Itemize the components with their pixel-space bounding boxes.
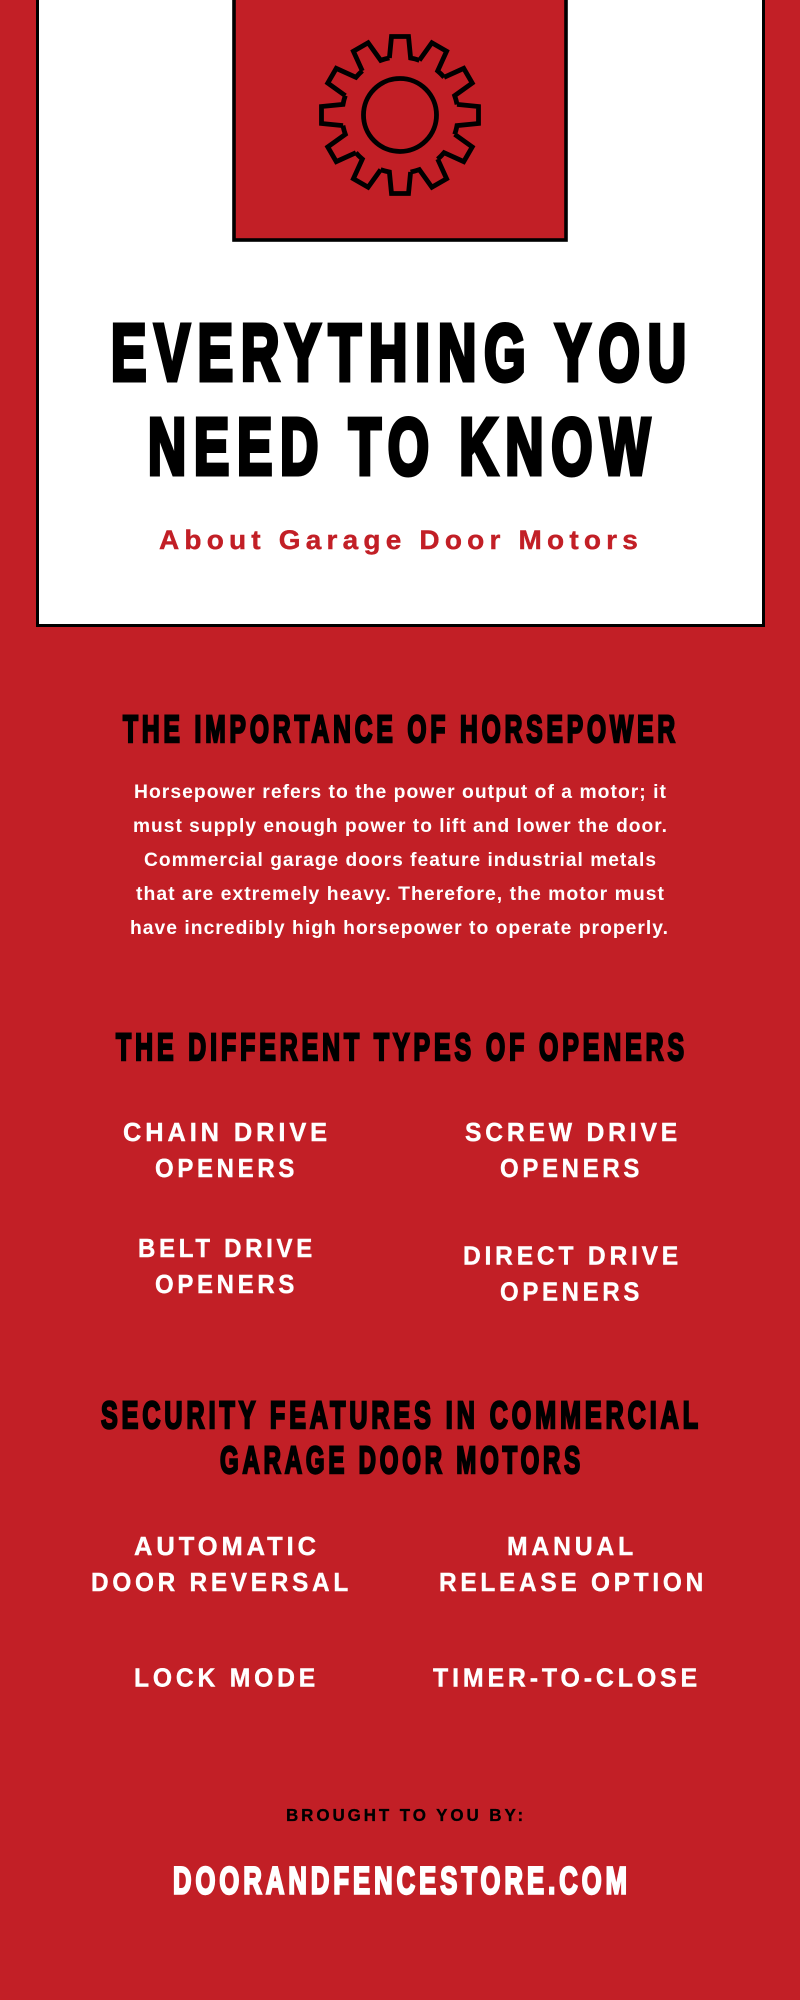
item: automatic door reversal: AUTOMATIC bbox=[134, 1531, 320, 1561]
item: manual release option: RELEASE OPTION bbox=[439, 1567, 707, 1597]
subtitle: About Garage Door Motors bbox=[159, 525, 643, 555]
title bbox=[111, 308, 694, 491]
item: automatic door reversal bbox=[91, 1531, 352, 1597]
item: timer-to-close: TIMER-TO-CLOSE bbox=[433, 1662, 701, 1692]
text block: horsepower description: have incredibly high horsepower to operate properly. bbox=[130, 918, 669, 939]
icon: gear bbox=[322, 36, 478, 194]
item: manual release option: MANUAL bbox=[507, 1531, 637, 1561]
item: screw drive openers bbox=[465, 1117, 681, 1183]
item: belt drive openers: BELT DRIVE bbox=[138, 1233, 316, 1263]
item: automatic door reversal: DOOR REVERSAL bbox=[91, 1567, 352, 1597]
heading: security features: GARAGE DOOR MOTORS bbox=[220, 1440, 584, 1482]
item: screw drive openers: SCREW DRIVE bbox=[465, 1117, 681, 1147]
item: lock mode: LOCK MODE bbox=[134, 1662, 319, 1692]
item: direct drive openers: OPENERS bbox=[500, 1276, 643, 1306]
text block: horsepower description: Horsepower refers to the power output of a motor; it bbox=[134, 782, 667, 803]
item: direct drive openers bbox=[463, 1240, 682, 1306]
panel: red icon box bbox=[234, 0, 566, 240]
panel: white header card bbox=[38, 0, 764, 626]
heading: security features bbox=[101, 1395, 702, 1482]
item: belt drive openers: OPENERS bbox=[155, 1269, 298, 1299]
section: security features bbox=[91, 1395, 707, 1692]
text block: horsepower description: Commercial garage doors feature industrial metals bbox=[144, 850, 657, 871]
text block: horsepower description: must supply enough power to lift and lower the door. bbox=[133, 816, 668, 837]
credit label: BROUGHT TO YOU BY: bbox=[286, 1805, 526, 1825]
item: manual release option bbox=[439, 1531, 707, 1597]
section: types of openers bbox=[116, 1027, 688, 1306]
footer bbox=[173, 1805, 631, 1902]
text block: horsepower description bbox=[130, 782, 669, 939]
item: direct drive openers: DIRECT DRIVE bbox=[463, 1240, 682, 1270]
item: chain drive openers bbox=[123, 1117, 331, 1183]
item: chain drive openers: OPENERS bbox=[155, 1153, 298, 1183]
section: importance of horsepower bbox=[123, 709, 679, 939]
item: screw drive openers: OPENERS bbox=[500, 1153, 643, 1183]
item: chain drive openers: CHAIN DRIVE bbox=[123, 1117, 331, 1147]
text block: horsepower description: that are extremely heavy. Therefore, the motor must bbox=[136, 884, 665, 905]
item: belt drive openers bbox=[138, 1233, 316, 1299]
